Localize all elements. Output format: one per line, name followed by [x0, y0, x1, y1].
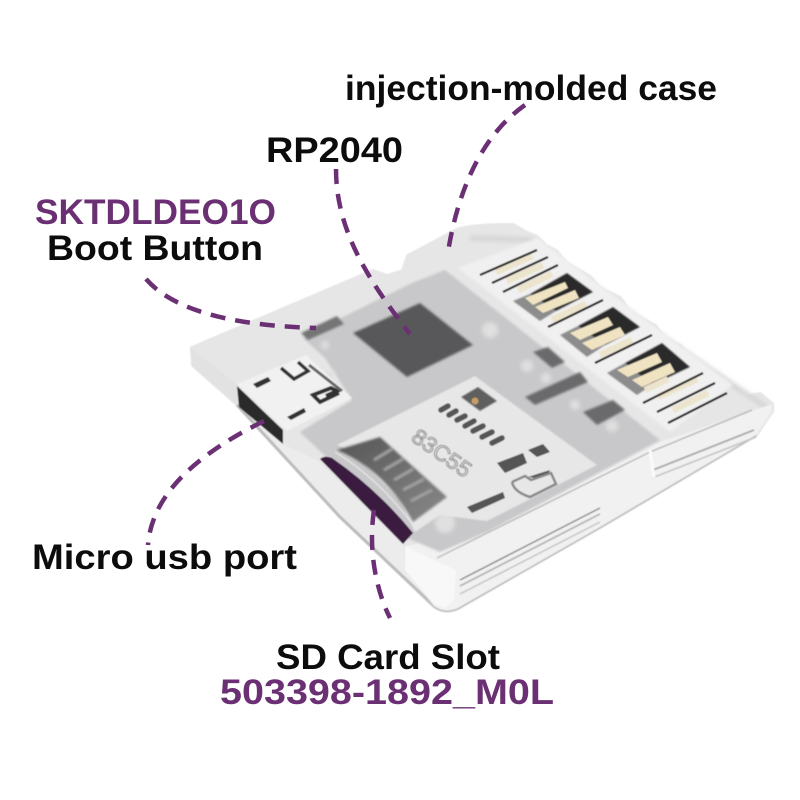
leader line: SD card slot — [372, 510, 390, 618]
SD card slot contacts — [337, 437, 447, 522]
gold edge contacts — [480, 250, 727, 423]
left case wall near port — [190, 347, 237, 405]
label: 503398-1892_M0L: 503398-1892_M0L — [220, 673, 554, 712]
label: SD Card Slot: SD Card Slot — [276, 638, 500, 677]
label: SKTDLDEO1O: SKTDLDEO1O — [35, 193, 276, 232]
leader line: injection-molded case — [448, 105, 525, 252]
dark contact pads — [513, 273, 690, 395]
recessed board area — [300, 270, 660, 552]
scalloped rim highlight — [470, 238, 770, 410]
faded gold contacts — [496, 256, 708, 410]
RP2040 chip — [353, 303, 473, 377]
SD socket shield — [337, 376, 597, 532]
purple SD card edge — [320, 457, 413, 544]
left case wall — [237, 405, 440, 612]
label: RP2040: RP2040 — [266, 131, 403, 170]
board highlights — [321, 322, 618, 533]
label: Micro usb port: Micro usb port — [32, 538, 297, 577]
wall line details — [437, 410, 756, 594]
micro USB port — [237, 355, 352, 444]
boot button — [301, 316, 344, 340]
SD socket pins and marking: 83C55 — [407, 424, 476, 483]
contact strip area — [458, 238, 733, 432]
SD socket pins and marking — [407, 387, 556, 513]
label: Boot Button: Boot Button — [47, 229, 263, 268]
gold pads — [525, 282, 675, 387]
cartridge case silhouette — [192, 225, 772, 611]
case outer edge shading — [237, 405, 756, 611]
right case wall — [405, 404, 772, 611]
contact separator lines — [480, 250, 727, 423]
cartridge device — [190, 225, 772, 612]
leader line: boot button — [146, 279, 316, 328]
leader line: micro USB port — [148, 421, 264, 545]
front corner of case — [405, 546, 456, 608]
leader line: RP2040 — [336, 169, 410, 334]
label: injection-molded case: injection-molded case — [345, 69, 717, 108]
small board components — [525, 347, 625, 425]
